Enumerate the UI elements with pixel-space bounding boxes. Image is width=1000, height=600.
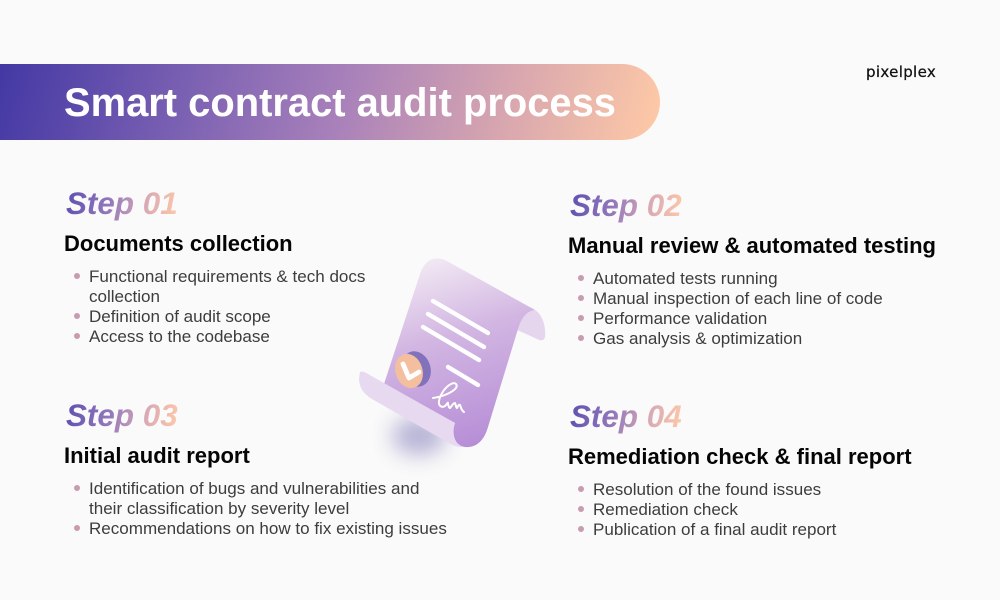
step 02 label: Step 02	[570, 188, 682, 223]
text lines	[423, 301, 488, 385]
step 02 list: Manual inspection of each line of code	[593, 289, 883, 308]
panel: step 03	[64, 398, 447, 538]
logo: pixelplex: pixelplex	[866, 63, 936, 81]
step 02 list: Performance validation	[593, 309, 767, 328]
icon: contract scroll	[359, 258, 546, 466]
step 03 list	[74, 479, 447, 538]
step 02 list	[578, 269, 883, 348]
step 04 heading: Remediation check & final report	[568, 444, 912, 469]
step 04 list	[578, 480, 836, 539]
step 01 heading: Documents collection	[64, 231, 293, 256]
lower curl	[359, 372, 463, 447]
step 02 list: Gas analysis & optimization	[593, 329, 802, 348]
shadow	[392, 417, 446, 455]
step 04 list: Publication of a final audit report	[593, 520, 836, 539]
step 02 heading: Manual review & automated testing	[568, 233, 936, 258]
step 04 list: Resolution of the found issues	[593, 480, 821, 499]
check badge	[391, 347, 435, 392]
step 01 list	[74, 267, 365, 346]
step 01 list: Definition of audit scope	[89, 307, 271, 326]
upper curl	[515, 307, 545, 340]
step 01 list: Access to the codebase	[89, 327, 270, 346]
step 03 heading: Initial audit report	[64, 443, 250, 468]
step 01 list: collection	[89, 287, 160, 306]
step 04 list: Remediation check	[593, 500, 738, 519]
panel: step 02	[568, 188, 936, 348]
step 03 list: Recommendations on how to fix existing issues	[89, 519, 447, 538]
signature	[433, 383, 464, 412]
step 01 list: Functional requirements & tech docs	[89, 267, 365, 286]
title banner	[0, 64, 660, 140]
title: Smart contract audit process	[64, 81, 616, 125]
step 01 label: Step 01	[66, 186, 178, 221]
step 03 label: Step 03	[66, 398, 178, 433]
step 02 list: Automated tests running	[593, 269, 778, 288]
panel: step 04	[568, 399, 912, 539]
step 03 list: their classification by severity level	[89, 499, 349, 518]
step 03 list: Identification of bugs and vulnerabilities and	[89, 479, 419, 498]
step 04 label: Step 04	[570, 399, 682, 434]
panel: step 01	[64, 186, 365, 346]
paper body	[384, 258, 535, 447]
